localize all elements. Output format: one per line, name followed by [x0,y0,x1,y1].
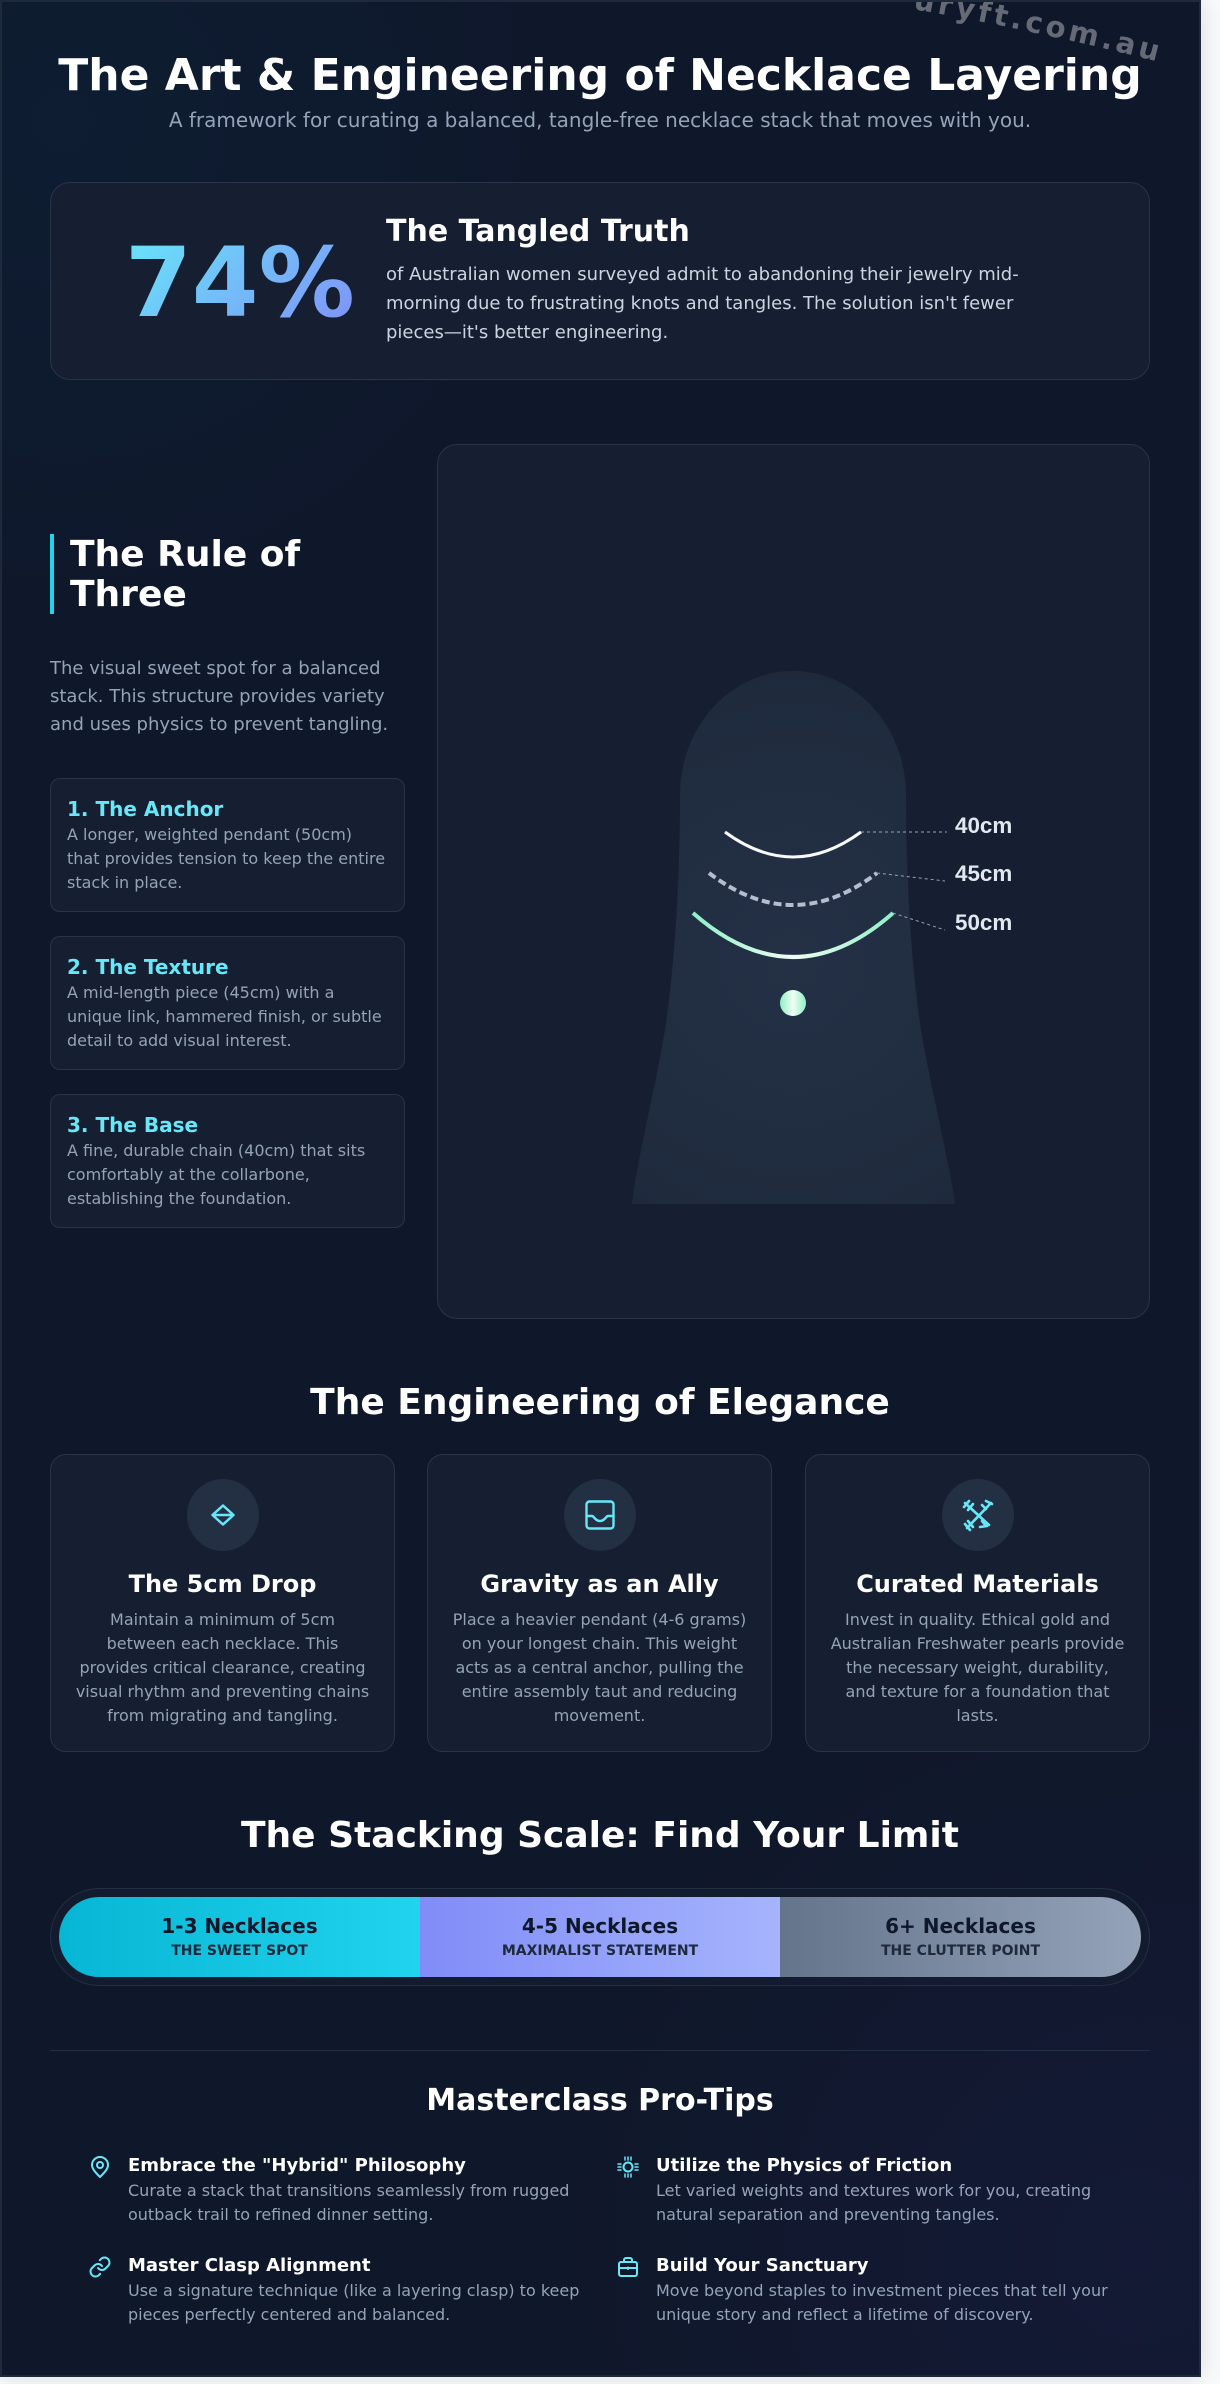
heading: stacking scale: The Stacking Scale: Find Your Limit [241,1815,959,1856]
segment: clutter: THE CLUTTER POINT [881,1943,1040,1959]
card: 5cm drop: between each necklace. This [107,1634,338,1653]
infographic page: natural separation and preventing tangles. [656,2205,1000,2224]
infographic page: Let varied weights and textures work for you, creating [656,2181,1091,2200]
card: 5cm drop: from migrating and tangling. [107,1706,338,1725]
card: the anchor: 1. The Anchor [67,797,223,821]
card: gravity [427,1454,772,1752]
infographic page: Move beyond staples to investment pieces that tell your [656,2281,1108,2300]
card: materials: Australian Freshwater pearls provide [831,1634,1124,1653]
icon: link [90,2256,110,2278]
card: materials: lasts. [956,1706,999,1725]
pendant [780,990,806,1016]
tip: clasp [128,2255,579,2324]
card: gravity: entire assembly taut and reducing [462,1682,737,1701]
rule of three intro: The visual sweet spot for a balanced stack. This structure provides variety and uses physics to prevent tangling. [50,658,388,735]
infographic page: Embrace the "Hybrid" Philosophy [128,2155,466,2176]
card: materials: Invest in quality. Ethical gold and [845,1610,1110,1629]
card: the texture: A mid-length piece (45cm) with a [67,983,334,1002]
silhouette [632,671,955,1204]
heading: pro tips: Masterclass Pro-Tips [426,2083,774,2118]
card: the texture [50,936,405,1070]
stacking scale bar [50,1888,1150,1986]
card: the base: 3. The Base [67,1113,198,1137]
icon: tray [564,1479,636,1551]
card: 5cm drop: Maintain a minimum of 5cm [110,1610,335,1629]
card: gravity: Gravity as an Ally [480,1570,719,1598]
card: the base: comfortably at the collarbone, [67,1165,310,1184]
heading: engineering of elegance: The Engineering of Elegance [310,1382,890,1423]
card: the anchor: that provides tension to keep the entire [67,849,385,868]
card: the base [50,1094,405,1228]
stat text: of Australian women surveyed admit to abandoning their jewelry mid-morning due to frustrating knots and tangles. The solution isn't fewer pieces—it's better engineering. [386,264,1019,343]
card: gravity: on your longest chain. This weight [462,1634,737,1653]
infographic page: Utilize the Physics of Friction [656,2155,952,2176]
segment: sweet spot [59,1897,420,1977]
card: the texture: detail to add visual interest. [67,1031,292,1050]
tip: sanctuary [656,2255,1108,2324]
infographic page: pieces perfectly centered and balanced. [128,2305,450,2324]
heading: rule of three [50,534,404,614]
title: The Art & Engineering of Necklace Layering [58,50,1142,101]
card: 5cm drop: The 5cm Drop [129,1570,316,1598]
length labels: 50cm [955,910,1012,935]
tip: hybrid [128,2155,569,2224]
card: the texture: unique link, hammered finish, or subtle [67,1007,382,1026]
segment: maximalist: 4-5 Necklaces [522,1914,678,1938]
infographic page: Build Your Sanctuary [656,2255,869,2276]
45cm necklace [709,873,877,905]
card: gravity: acts as a central anchor, pulling the [455,1658,744,1677]
diagram: silhouette with necklaces [632,671,1012,1204]
segment: clutter: 6+ Necklaces [885,1914,1036,1938]
card: 5cm drop: visual rhythm and preventing chains [76,1682,369,1701]
length labels [955,813,1012,935]
heading: rule of three: The Rule of Three [70,534,300,615]
segment: sweet spot: THE SWEET SPOT [171,1943,308,1959]
card: gravity: movement. [554,1706,645,1725]
panel: necklace diagram [437,444,1150,1319]
40cm necklace [725,832,861,857]
card: materials: and texture for a foundation that [846,1682,1109,1701]
icon: drop [187,1479,259,1551]
icon: pin [91,2156,109,2178]
tip: friction [656,2155,1091,2224]
segment: sweet spot: 1-3 Necklaces [161,1914,318,1938]
card: the anchor [50,778,405,912]
card: materials: the necessary weight, durability, [846,1658,1109,1677]
card: the base: A fine, durable chain (40cm) that sits [67,1141,365,1160]
segment: maximalist [420,1897,780,1977]
card: materials [805,1454,1150,1752]
50cm necklace [693,913,893,957]
length labels: 40cm [955,813,1012,838]
infographic page: Use a signature technique (like a layering clasp) to keep [128,2281,579,2300]
subtitle: A framework for curating a balanced, tangle-free necklace stack that moves with you. [169,108,1031,132]
infographic page: outback trail to refined dinner setting. [128,2205,433,2224]
card: the base: establishing the foundation. [67,1189,291,1208]
segment: clutter [780,1897,1141,1977]
panel: tangled truth [50,182,1150,380]
card: materials: Curated Materials [856,1570,1099,1598]
card: the texture: 2. The Texture [67,955,229,979]
segment: maximalist: MAXIMALIST STATEMENT [502,1943,698,1959]
length labels: 45cm [955,861,1012,886]
infographic page: Curate a stack that transitions seamlessly from rugged [128,2181,569,2200]
leader lines [861,832,947,930]
icon: tools [942,1479,1014,1551]
infographic page: unique story and reflect a lifetime of discovery. [656,2305,1034,2324]
card: the anchor: stack in place. [67,873,182,892]
card: gravity: Place a heavier pendant (4-6 grams) [453,1610,746,1629]
card: the anchor: A longer, weighted pendant (50cm) [67,825,352,844]
infographic page: Master Clasp Alignment [128,2255,370,2276]
icon: briefcase [618,2257,638,2277]
big stat: 74% [125,227,355,339]
card: 5cm drop: provides critical clearance, creating [79,1658,366,1677]
card: 5cm drop [50,1454,395,1752]
stat heading: The Tangled Truth [386,214,690,249]
icon: sun [617,2156,639,2178]
